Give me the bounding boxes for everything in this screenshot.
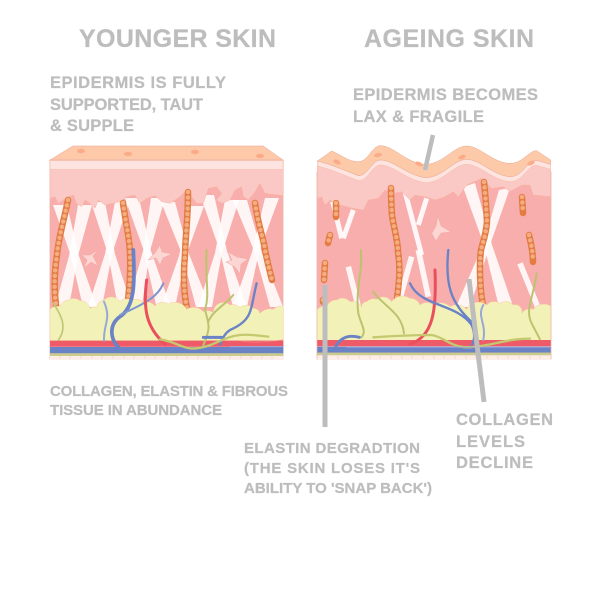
dermis — [317, 172, 551, 359]
subcutaneous fat — [317, 296, 551, 341]
text: elastin degradation: ELASTIN DEGRADTION — [244, 440, 420, 457]
surface pores — [77, 149, 264, 158]
text: collagen abundance — [50, 383, 288, 419]
text: elastin degradation — [244, 440, 432, 497]
wavy epidermis — [317, 146, 551, 178]
text: elastin degradation: ABILITY TO 'SNAP BACK') — [244, 480, 432, 497]
text: elastin degradation: (THE SKIN LOSES IT'S — [244, 460, 420, 477]
text: collagen decline: COLLAGEN — [456, 411, 553, 429]
blood vessels and nerves — [50, 250, 283, 359]
text: epidermis becomes lax — [353, 86, 538, 126]
sparse collagen fibres — [333, 183, 538, 308]
text: collagen abundance: COLLAGEN, ELASTIN & FIBROUS — [50, 383, 288, 400]
title: younger skin: YOUNGER SKIN — [79, 25, 276, 53]
panel: ageing skin diagram — [317, 146, 551, 359]
text: epidermis becomes lax: LAX & FRAGILE — [353, 108, 484, 126]
elastin fragments — [323, 182, 533, 305]
text: epidermis fully supported: SUPPORTED, TAUT — [50, 96, 203, 114]
text: collagen decline: DECLINE — [456, 454, 533, 472]
fibroblast cell — [431, 216, 451, 241]
blood vessels and nerves — [317, 250, 551, 359]
pale epidermis band — [50, 160, 283, 170]
title: ageing skin: AGEING SKIN — [364, 25, 534, 53]
text: epidermis fully supported: & SUPPLE — [50, 117, 134, 135]
epidermis top surface — [50, 146, 283, 160]
arrow: collagen pointer — [469, 279, 484, 402]
arrow: elastin pointer — [322, 285, 328, 427]
wavy pale band — [317, 159, 551, 183]
papillary dermis — [317, 159, 551, 210]
text: epidermis becomes lax: EPIDERMIS BECOMES — [353, 86, 538, 104]
arrow: epidermis pointer — [425, 135, 433, 170]
elastin fibres — [55, 192, 272, 308]
subcutaneous fat — [50, 297, 283, 341]
text: epidermis fully supported: EPIDERMIS IS FULLY — [50, 74, 226, 92]
papillary dermis — [50, 160, 283, 208]
text: collagen decline: LEVELS — [456, 433, 525, 451]
panel: younger skin diagram — [50, 146, 283, 359]
dermis — [50, 160, 283, 359]
collagen fibres — [53, 195, 283, 307]
surface pores — [332, 152, 535, 168]
text: epidermis fully supported — [50, 74, 226, 135]
text: collagen abundance: TISSUE IN ABUNDANCE — [50, 402, 222, 419]
fibroblast cells — [82, 245, 248, 274]
text: collagen decline — [456, 411, 553, 472]
